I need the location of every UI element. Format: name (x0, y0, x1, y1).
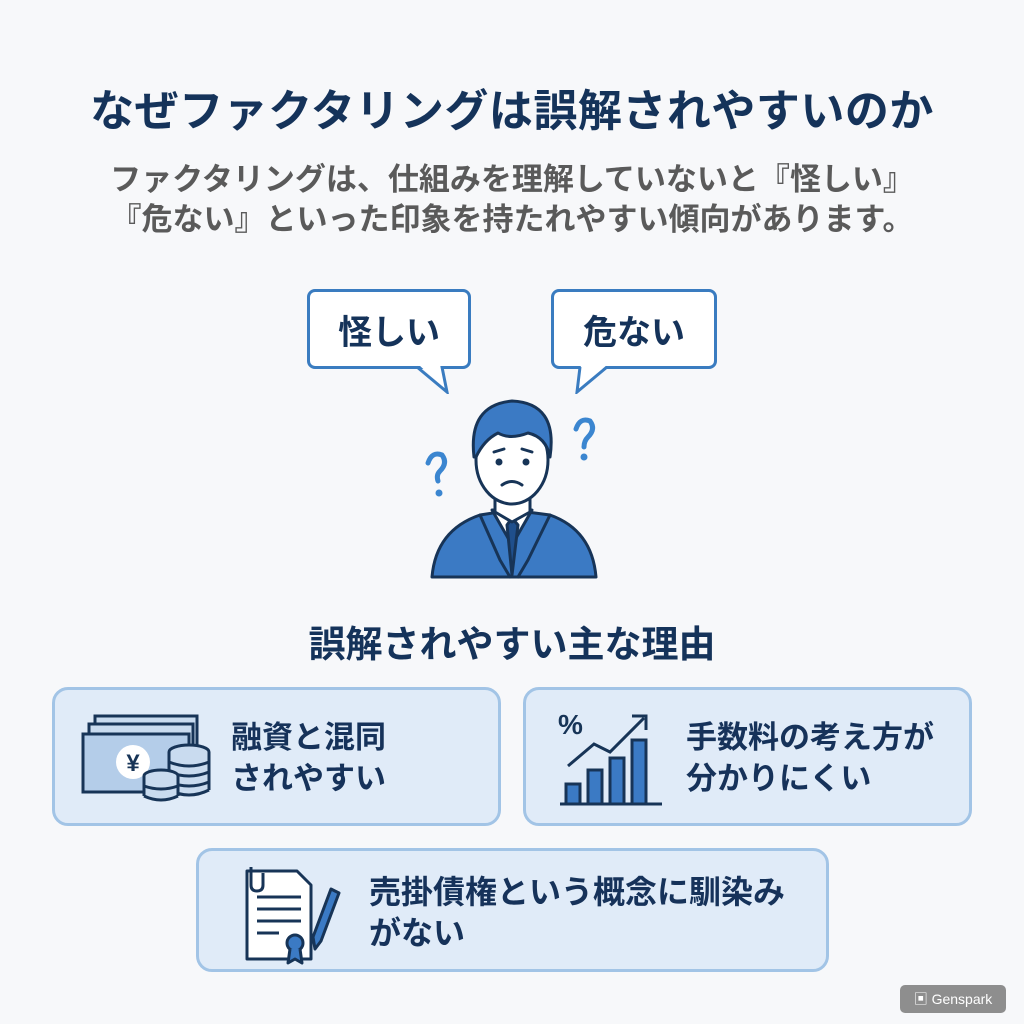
subtitle: 『危ない』といった印象を持たれやすい傾向があります。 (111, 202, 913, 237)
section heading: 誤解されやすい主な理由 (308, 624, 716, 665)
subtitle (110, 162, 914, 237)
card: 売掛債権 (196, 848, 829, 972)
icon: chart with percent (558, 709, 662, 806)
subtitle: ファクタリングは、仕組みを理解していないと『怪しい』 (110, 162, 914, 197)
speech bubble: 怪しい (307, 289, 471, 394)
title: なぜファクタリングは誤解されやすいのか (90, 87, 934, 136)
icon: money and coins (82, 714, 210, 802)
icon: document and pen (246, 867, 340, 965)
card: 手数料: 分かりにくい (686, 761, 871, 796)
speech bubble: 危ない: 危ない (583, 314, 685, 352)
icon: money and coins: ¥ (126, 750, 140, 777)
card: 手数料: 手数料の考え方が (686, 720, 934, 755)
badge: Genspark (900, 985, 1006, 1013)
badge: Genspark: ▣ Genspark (914, 991, 992, 1007)
card: 手数料 (523, 687, 972, 826)
card: 融資と混同 (52, 687, 501, 826)
card: 売掛債権: がない (369, 915, 465, 951)
speech bubble: 危ない (551, 289, 717, 394)
speech bubble: 怪しい: 怪しい (338, 314, 440, 352)
card: 融資と混同: されやすい (231, 761, 386, 796)
icon: chart with percent: % (558, 709, 583, 740)
card: 融資と混同: 融資と混同 (231, 720, 386, 755)
card: 売掛債権: 売掛債権という概念に馴染み (369, 874, 785, 910)
illustration: confused businessman (426, 400, 598, 579)
